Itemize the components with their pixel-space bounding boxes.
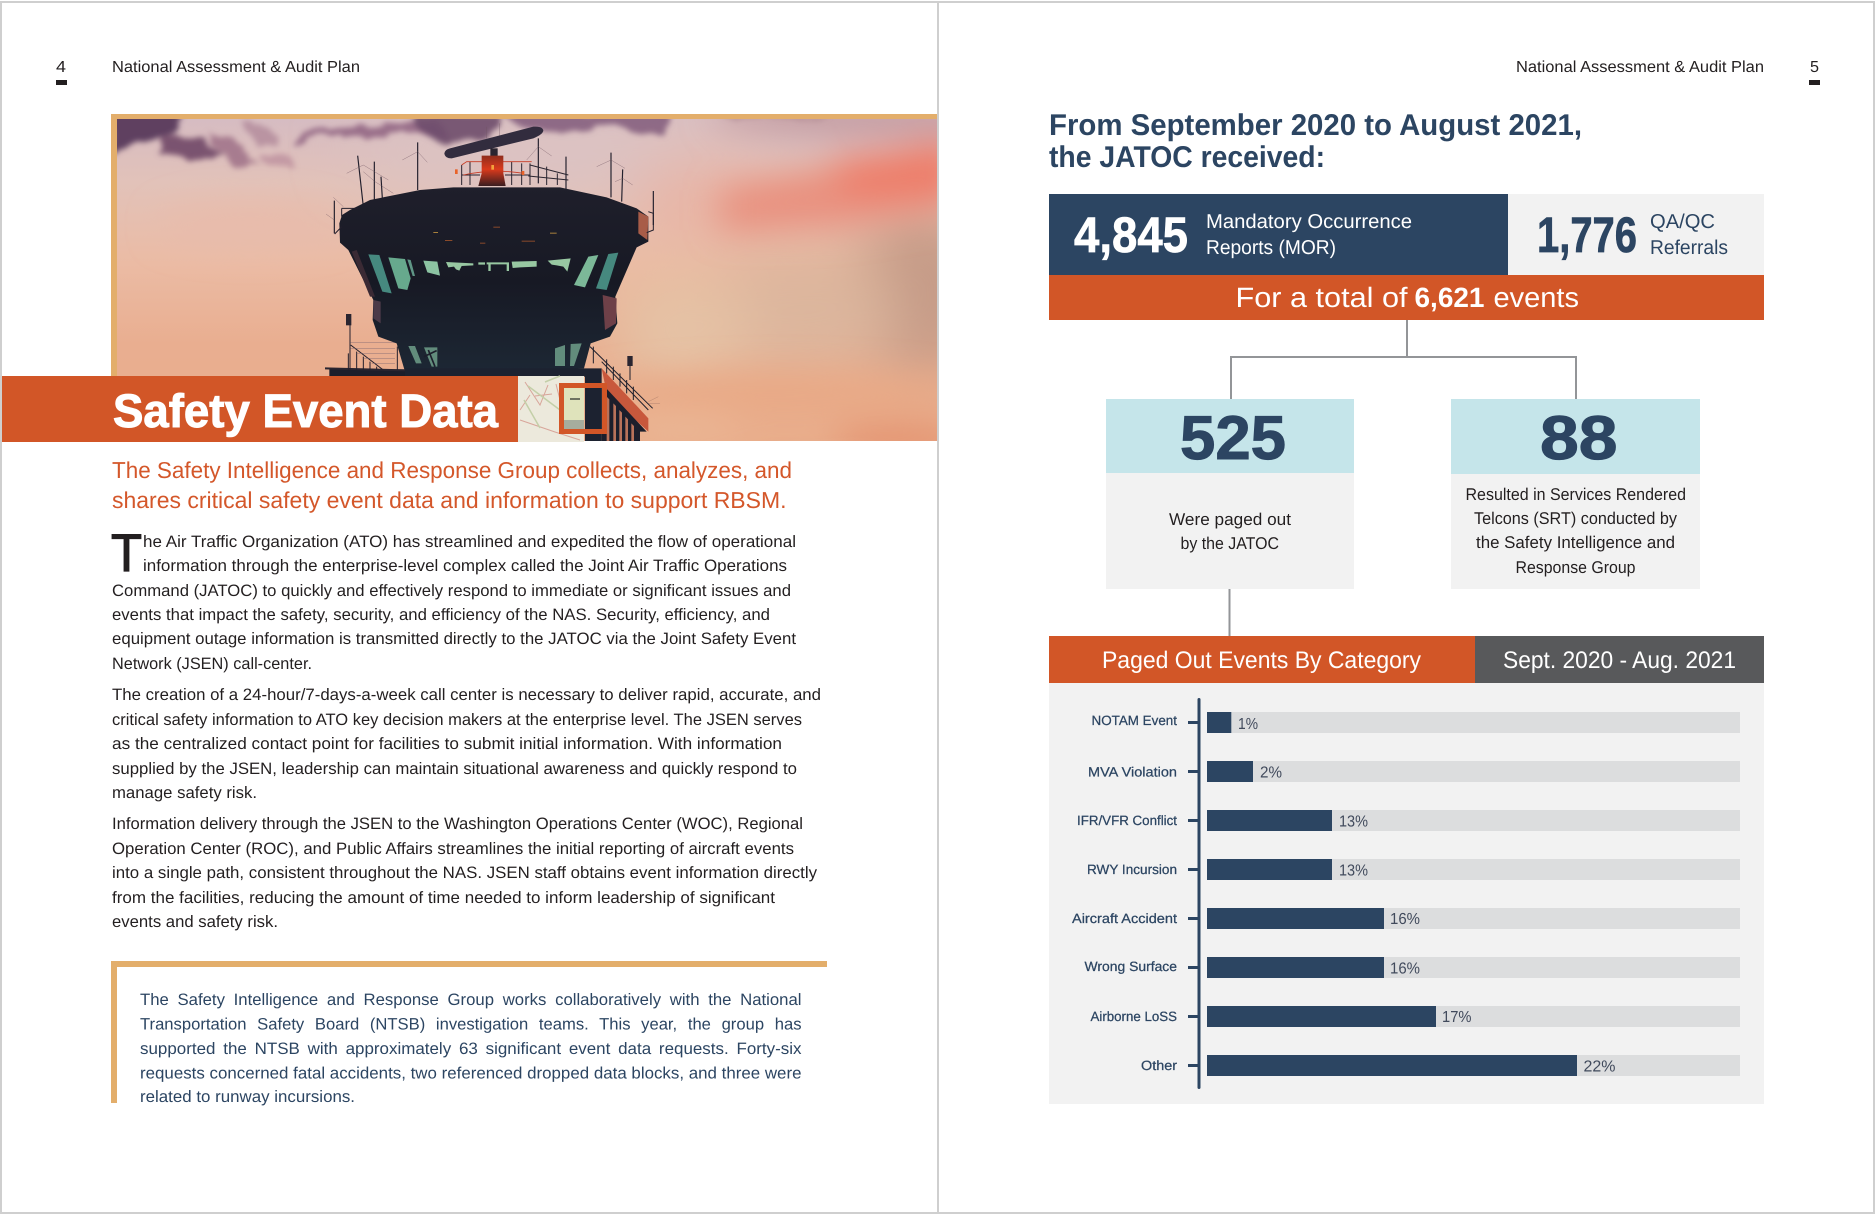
MOR block: Reports (MOR)	[1206, 237, 1336, 259]
row: RWY Incursion: RWY Incursion	[1087, 862, 1177, 877]
page number marker	[1809, 80, 1820, 85]
lower cab windows	[408, 346, 437, 367]
title: Safety Event Data	[113, 384, 499, 437]
small cab lights	[433, 227, 557, 244]
connector: tree lines	[1230, 320, 1576, 636]
row: MVA Violation: 2%	[1260, 764, 1282, 782]
right page heading: From September 2020 to August 2021,	[1049, 109, 1582, 142]
paragraph 2: supplied by the JSEN, leadership can maintain situational awareness and quickly respond to	[112, 760, 797, 778]
row: IFR/VFR Conflict: 13%	[1339, 814, 1368, 830]
row: MVA Violation	[1088, 761, 1740, 782]
right page heading: the JATOC received:	[1049, 141, 1325, 174]
chart header	[1049, 636, 1764, 683]
MOR block: 4,845	[1074, 207, 1188, 263]
callout text: Transportation Safety Board (NTSB) investigation teams. This year, the group has	[140, 1016, 802, 1034]
panel: paged out card: by the JATOC	[1180, 534, 1279, 553]
row: IFR/VFR Conflict	[1077, 810, 1740, 831]
row: MVA Violation: MVA Violation	[1088, 764, 1177, 780]
row: Wrong Surface	[1084, 957, 1740, 978]
QA/QC block: Referrals	[1650, 237, 1728, 259]
panel: SRT card	[1451, 399, 1700, 589]
callout text	[140, 991, 802, 1106]
subheading: The Safety Intelligence and Response Group collects, analyzes, and	[112, 457, 792, 483]
row: RWY Incursion	[1087, 859, 1740, 880]
row: NOTAM Event	[1092, 712, 1740, 733]
panel: SRT card: Telcons (SRT) conducted by	[1474, 509, 1677, 528]
row: NOTAM Event: NOTAM Event	[1092, 713, 1177, 728]
panel: paged out card	[1106, 399, 1354, 589]
row: IFR/VFR Conflict: IFR/VFR Conflict	[1077, 813, 1177, 828]
total bar: events	[1494, 282, 1579, 313]
paragraph 3: events and safety risk.	[112, 913, 278, 931]
paragraph 3	[112, 815, 818, 931]
callout text: related to runway incursions.	[140, 1088, 355, 1106]
callout text: supported the NTSB with approximately 63 significant event data requests. Forty-six	[140, 1040, 802, 1058]
paragraph 1	[112, 533, 796, 673]
page number 5: 5	[1810, 59, 1819, 76]
paragraph 1: information through the enterprise-level complex called the Joint Air Traffic Operations	[143, 557, 787, 575]
row: Airborne LoSS: Airborne LoSS	[1090, 1009, 1177, 1024]
right page heading	[1049, 109, 1582, 174]
paragraph 1: he Air Traffic Organization (ATO) has streamlined and expedited the flow of operational	[143, 533, 796, 551]
QA/QC block	[1508, 194, 1764, 275]
paragraph 1: equipment outage information is transmitted directly to the JATOC via the Joint Safety Event	[112, 630, 796, 648]
row: Other	[1141, 1055, 1740, 1076]
callout text: The Safety Intelligence and Response Group works collaboratively with the National	[140, 991, 801, 1009]
panel: SRT card: 88	[1540, 404, 1618, 473]
subheading: shares critical safety event data and information to support RBSM.	[112, 487, 786, 513]
row: Airborne LoSS: 17%	[1442, 1009, 1472, 1026]
photo: control tower at sunset	[111, 114, 937, 442]
gold photo frame	[111, 114, 937, 376]
total bar	[1049, 275, 1764, 320]
total bar: 6,621	[1414, 282, 1484, 313]
chart header: Paged Out Events By Category	[1102, 647, 1421, 674]
paragraph 1: Network (JSEN) call-center.	[112, 655, 312, 673]
title banner	[2, 376, 518, 442]
tower body	[339, 187, 648, 372]
row: Wrong Surface: 16%	[1390, 960, 1420, 978]
panel: SRT card: Response Group	[1516, 558, 1636, 577]
panel: paged out card: Were paged out	[1169, 510, 1291, 529]
body text	[111, 524, 821, 931]
panel: paged out card: 525	[1180, 404, 1286, 473]
row: Aircraft Accident	[1072, 908, 1740, 929]
callout	[111, 961, 827, 1106]
railing and beacon	[462, 162, 568, 185]
right railing	[590, 347, 653, 410]
QA/QC block: QA/QC	[1650, 211, 1715, 233]
chart background	[1049, 683, 1764, 1104]
chart axis	[1188, 698, 1200, 1089]
row: Airborne LoSS	[1090, 1006, 1740, 1027]
subheading	[112, 457, 792, 513]
MOR block: Mandatory Occurrence	[1206, 211, 1412, 233]
paragraph 1: events that impact the safety, security, and efficiency of the NAS. Security, efficiency, and	[112, 606, 770, 624]
deck side rails	[335, 208, 653, 234]
chart header: Sept. 2020 - Aug. 2021	[1503, 647, 1736, 674]
orange focus square	[562, 386, 604, 432]
running header right: National Assessment & Audit Plan	[1516, 59, 1764, 76]
cab windows	[368, 253, 618, 293]
map inset	[518, 376, 584, 442]
panel: SRT card: the Safety Intelligence and	[1476, 533, 1675, 552]
clouds	[110, 112, 830, 168]
total bar: For a total of	[1236, 282, 1408, 313]
page number marker	[56, 80, 67, 85]
paragraph 2: manage safety risk.	[112, 784, 257, 802]
panel: totals	[1049, 194, 1764, 320]
row: Other: Other	[1141, 1058, 1178, 1073]
paragraph 1: Command (JATOC) to quickly and effectively respond to immediate or significant issues and	[112, 582, 791, 600]
drop cap: T	[111, 524, 142, 583]
row: Aircraft Accident: Aircraft Accident	[1072, 911, 1177, 926]
paragraph 2	[112, 686, 821, 802]
left railing	[348, 325, 398, 370]
running header left: National Assessment & Audit Plan	[112, 59, 360, 76]
callout text: requests concerned fatal accidents, two referenced dropped data blocks, and three were	[140, 1064, 802, 1082]
row: Aircraft Accident: 16%	[1390, 911, 1420, 928]
sunset sky and tower	[117, 119, 937, 441]
row: NOTAM Event: 1%	[1238, 716, 1258, 733]
row: Wrong Surface: Wrong Surface	[1084, 959, 1177, 974]
paragraph 2: as the centralized contact point for facilities to submit initial information. With information	[112, 735, 782, 753]
paragraph 2: critical safety information to ATO key decision makers at the enterprise level. The JSEN serves	[112, 711, 802, 729]
paragraph 2: The creation of a 24-hour/7-days-a-week call center is necessary to deliver rapid, accurate, and	[112, 686, 821, 704]
QA/QC block: 1,776	[1537, 207, 1637, 263]
panel: left page header	[56, 59, 360, 85]
page number 4: 4	[56, 59, 66, 76]
MOR block	[1049, 194, 1508, 275]
row: RWY Incursion: 13%	[1339, 862, 1368, 880]
panel: right page header	[1516, 59, 1820, 85]
radar antenna	[444, 127, 543, 158]
panel: bar chart	[1049, 636, 1764, 1104]
callout gold frame	[111, 961, 827, 1103]
tower silhouette	[325, 123, 660, 443]
paragraph 3: Information delivery through the JSEN to the Washington Operations Center (WOC), Regional	[112, 815, 803, 833]
paragraph 3: Operation Center (ROC), and Public Affairs streamlines the initial reporting of aircraft events	[112, 840, 794, 858]
panel: SRT card: Resulted in Services Rendered	[1466, 485, 1686, 504]
paragraph 3: from the facilities, reducing the amount of time needed to inform leadership of significant	[112, 889, 775, 907]
row: Other: 22%	[1584, 1058, 1616, 1076]
lower deck	[329, 369, 407, 377]
paragraph 3: into a single path, consistent throughout the NAS. JSEN staff obtains event information directly	[112, 864, 818, 882]
